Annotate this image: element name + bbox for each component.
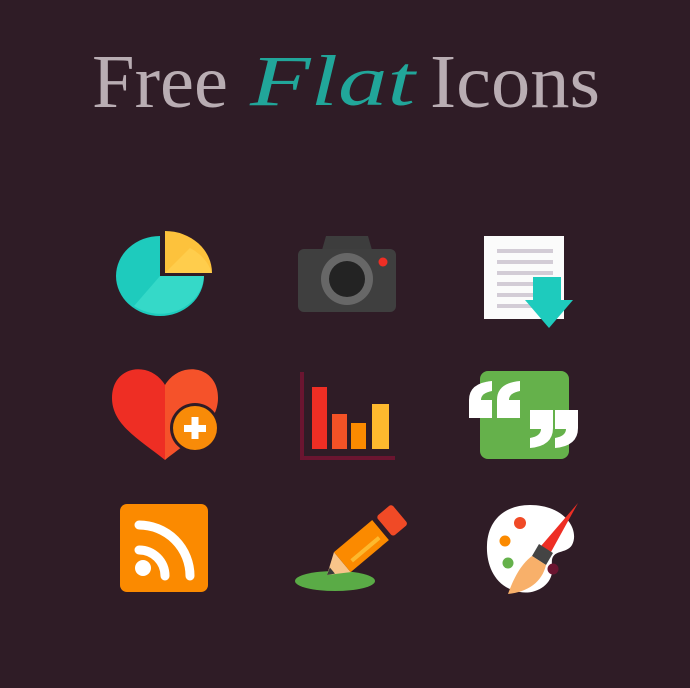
icon: pencil bbox=[295, 504, 408, 591]
icon: palette bbox=[487, 503, 578, 594]
title: Flat bbox=[249, 41, 418, 121]
icon: pie chart bbox=[116, 231, 212, 316]
icon: rss bbox=[120, 504, 208, 592]
icon: heart plus bbox=[112, 369, 220, 460]
icon: camera bbox=[298, 236, 396, 312]
icon: bar chart bbox=[300, 372, 395, 460]
title: Free bbox=[92, 40, 228, 124]
title: Icons bbox=[430, 40, 600, 124]
title bbox=[92, 40, 600, 124]
icon: quotes bbox=[469, 371, 578, 459]
icon: document download bbox=[484, 236, 573, 328]
